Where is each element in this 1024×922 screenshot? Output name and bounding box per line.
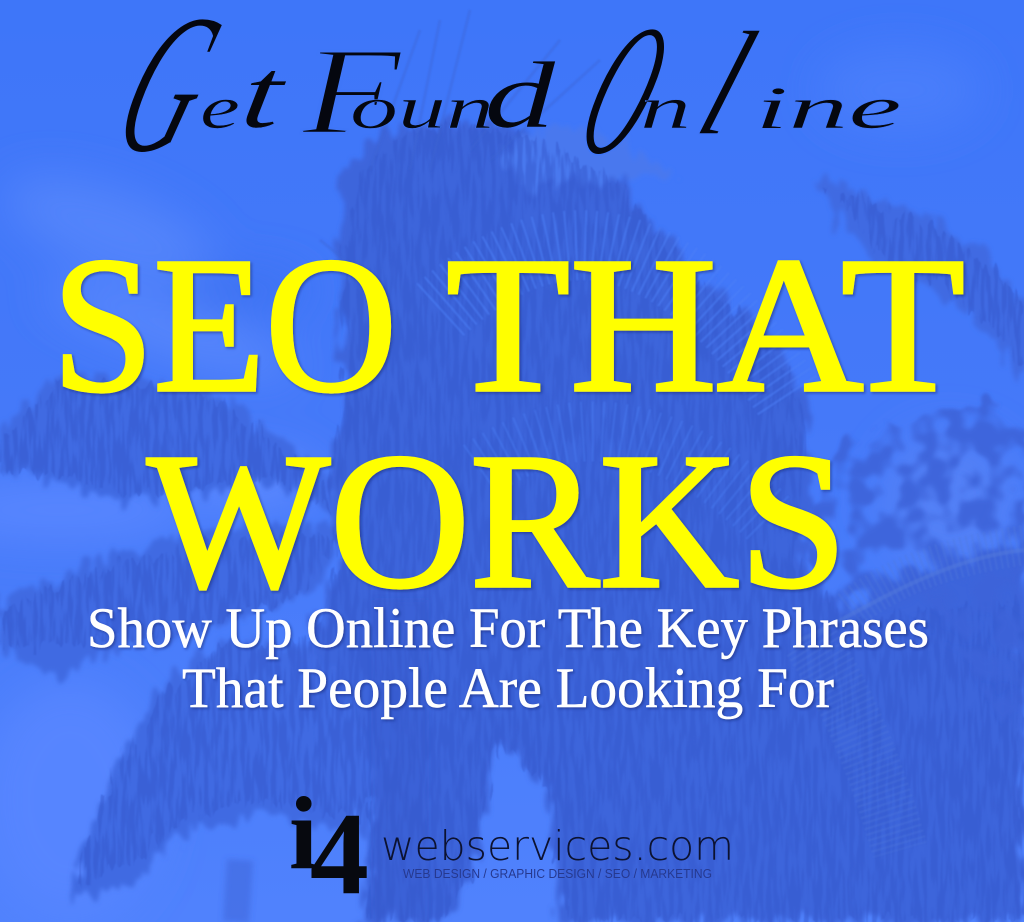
subheading xyxy=(87,597,929,720)
script heading: Get Found Online: oun xyxy=(350,75,494,141)
logo wordmark: webservices.com xyxy=(381,822,734,870)
logo: i4 webservices.com xyxy=(289,776,734,919)
script heading: Get Found Online: l xyxy=(680,1,774,167)
main title: SEO THAT WORKS xyxy=(52,217,965,628)
script heading: Get Found Online xyxy=(92,0,902,195)
main title: SEO THAT WORKS: SEO xyxy=(52,217,397,432)
script heading: Get Found Online: e xyxy=(200,75,240,141)
logo mark: i4: 4 xyxy=(310,788,369,919)
logo mark: i4: i xyxy=(289,776,318,891)
main title: SEO THAT WORKS: THAT xyxy=(446,217,965,432)
subheading: That People Are Looking For xyxy=(182,657,834,720)
subheading: Show Up Online For The Key Phrases xyxy=(87,597,929,660)
script heading: Get Found Online: n xyxy=(640,75,691,141)
logo tagline: WEB DESIGN / GRAPHIC DESIGN / SEO / MARKETING xyxy=(403,867,712,881)
script heading: Get Found Online: t xyxy=(235,38,290,149)
script heading: Get Found Online: d xyxy=(484,42,555,148)
script heading: Get Found Online: ine xyxy=(755,75,902,141)
script heading: Get Found Online: F xyxy=(302,23,401,161)
main title: SEO THAT WORKS: WORKS xyxy=(147,413,847,628)
